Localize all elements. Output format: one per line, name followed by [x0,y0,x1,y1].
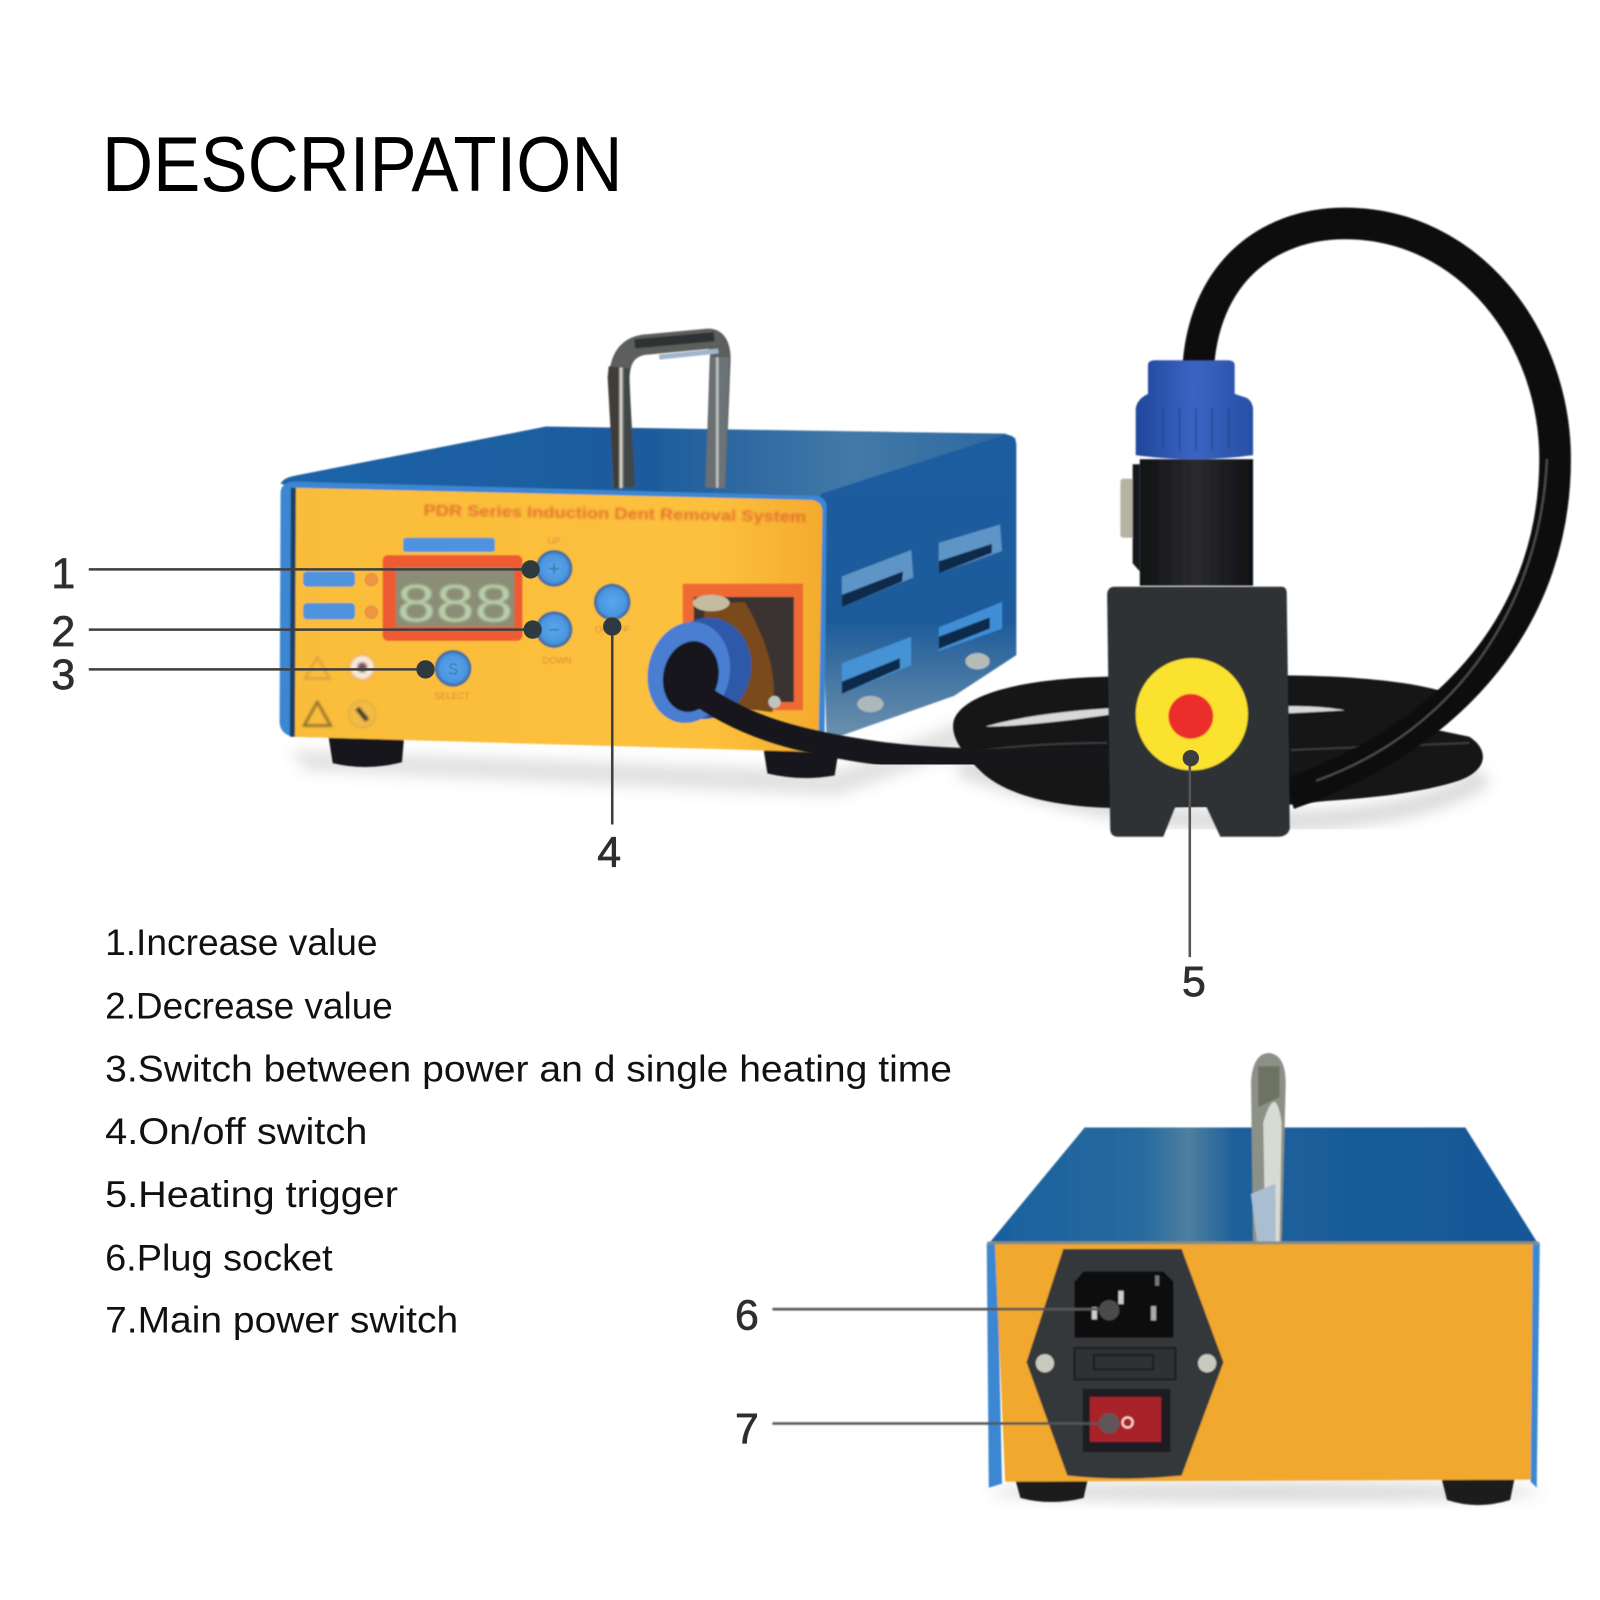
output connector socket [638,584,803,731]
feature list: 2.Decrease value [105,985,393,1026]
side vents [842,524,1002,694]
panel heading: PDR Series Induction Dent Removal System [423,502,806,526]
control buttons: UP [548,536,560,546]
control buttons [434,536,631,701]
rear leader lines and markers [772,1300,1119,1434]
control buttons: ON/OFF [595,625,630,635]
power socket [1074,1271,1173,1338]
front panel yellow [292,488,822,752]
trigger red button [1168,694,1213,739]
control buttons: S [448,661,458,678]
rear handle [1251,1053,1286,1245]
control buttons: DOWN [543,655,572,665]
feature list: 5.Heating trigger [105,1174,398,1215]
front view of the dent removal machine [280,337,1016,796]
heating trigger hand tool [1107,587,1290,837]
leader lines and markers [89,560,1199,957]
title: DESCRIPATION [102,122,622,208]
plug connector [1120,360,1253,586]
coiled cable arc up to the plug [1198,223,1555,794]
callout numbers 1 to 5 [51,550,1206,1006]
cable coil on the floor [953,676,1485,822]
machine ground shadow [291,714,980,796]
digital display: 888 [397,574,513,633]
feature list: 7.Main power switch [105,1300,458,1341]
callout numbers 1 to 5: 5 [1182,958,1206,1006]
feature list: 4.On/off switch [105,1111,367,1152]
callout numbers 6 and 7: 6 [735,1292,759,1340]
trigger yellow disc [1136,658,1248,770]
power entry module [1027,1249,1223,1479]
digital display [383,538,522,641]
control buttons: − [548,620,560,642]
side panel screws [857,653,990,712]
indicator labels and LEDs [303,571,378,619]
fuse holder [1074,1348,1176,1380]
feature list: 1.Increase value [105,922,378,963]
callout numbers 1 to 5: 4 [597,828,621,876]
rear yellow panel [995,1244,1533,1482]
rear left and right blue edges [987,1243,1540,1488]
carrying handle [618,337,720,488]
feature list: 3.Switch between power an d single heating time [105,1049,952,1090]
callout numbers 6 and 7 [735,1292,759,1453]
cable from machine to hand tool [692,689,1133,761]
rear top panel [988,1128,1539,1245]
warning icons [304,655,376,728]
callout numbers 1 to 5: 3 [51,651,75,699]
side panel [820,435,1016,741]
feet [329,737,839,778]
rear view of the machine [772,1053,1541,1505]
top panel [281,427,1016,498]
rear feet [1015,1480,1514,1505]
feature list [105,922,952,1341]
mounting screws [1036,1354,1054,1372]
callout numbers 6 and 7: 7 [735,1405,759,1453]
control buttons: + [548,559,560,581]
control buttons: SELECT [434,691,470,701]
feature list: 6.Plug socket [105,1237,333,1278]
callout numbers 1 to 5: 1 [51,550,75,598]
front panel blue frame [280,482,827,751]
rocker switch [1083,1389,1170,1452]
rear shadow [990,1482,1541,1502]
callout numbers 1 to 5: 2 [51,608,75,656]
gaps between coil loops [986,706,1345,727]
